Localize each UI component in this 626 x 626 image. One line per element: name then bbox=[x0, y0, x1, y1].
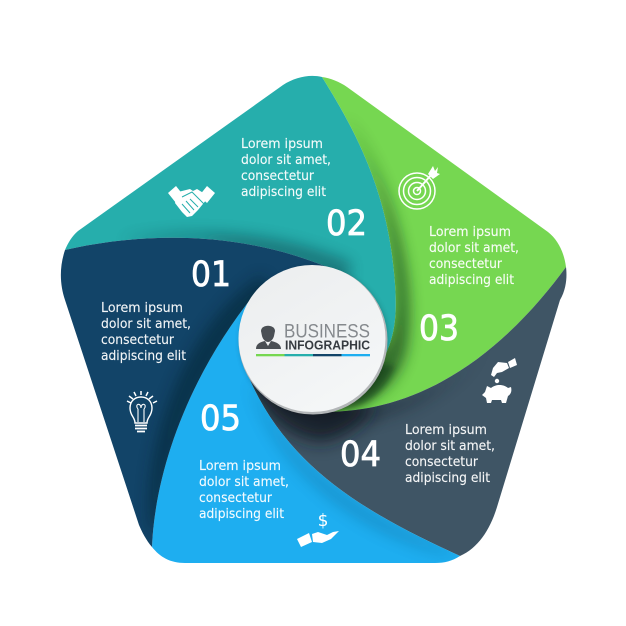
text: 02 description: dolor sit amet, bbox=[241, 153, 331, 168]
panel: 02 teal segment bbox=[65, 76, 396, 372]
text: 02 description: Lorem ipsum bbox=[241, 137, 323, 152]
text: 04 description: dolor sit amet, bbox=[405, 439, 495, 454]
infographic: pentagon with five spiral segments bbox=[60, 76, 566, 563]
number: 01: 01 bbox=[191, 255, 231, 295]
text: 01 description bbox=[101, 301, 191, 364]
number: 03: 03 bbox=[419, 309, 459, 349]
panel: 05 blue segment bbox=[152, 285, 460, 563]
number: 05: 05 bbox=[200, 399, 241, 439]
panel: 03 green segment bbox=[312, 77, 566, 412]
panel: 04 slate segment bbox=[245, 267, 566, 556]
heading: INFOGRAPHIC: INFOGRAPHIC bbox=[285, 338, 370, 352]
icon: businessman bbox=[256, 326, 281, 349]
text: 02 description bbox=[241, 137, 331, 200]
text: 04 description: adipiscing elit bbox=[405, 471, 490, 486]
center circle badge bbox=[238, 265, 388, 415]
text: 03 description: consectetur bbox=[429, 257, 503, 272]
text: 03 description: Lorem ipsum bbox=[429, 225, 511, 240]
text: 01 description: Lorem ipsum bbox=[101, 301, 183, 316]
colour bar bbox=[256, 354, 370, 356]
text: 04 description: Lorem ipsum bbox=[405, 423, 487, 438]
panel: 01 navy segment bbox=[61, 238, 345, 547]
number: 04: 04 bbox=[340, 435, 381, 475]
icon: light bulb bbox=[127, 391, 157, 432]
text: 05 description: adipiscing elit bbox=[199, 507, 284, 522]
icon: hand dropping coin into piggy bank bbox=[482, 358, 517, 403]
icon: target with arrow bbox=[399, 166, 440, 209]
text: 02 description: consectetur bbox=[241, 169, 315, 184]
text: 01 description: adipiscing elit bbox=[101, 349, 186, 364]
text: 05 description: Lorem ipsum bbox=[199, 459, 281, 474]
text: 04 description bbox=[405, 423, 495, 486]
text: 05 description: dolor sit amet, bbox=[199, 475, 289, 490]
text: 01 description: dolor sit amet, bbox=[101, 317, 191, 332]
text: 03 description bbox=[429, 225, 519, 288]
text: 02 description: adipiscing elit bbox=[241, 185, 326, 200]
text: 04 description: consectetur bbox=[405, 455, 479, 470]
text: 01 description: consectetur bbox=[101, 333, 175, 348]
number: 02: 02 bbox=[326, 204, 367, 244]
text: 05 description: consectetur bbox=[199, 491, 273, 506]
text: 03 description: dolor sit amet, bbox=[429, 241, 519, 256]
text: 05 description bbox=[199, 459, 289, 522]
heading: BUSINESS: BUSINESS bbox=[284, 320, 370, 342]
icon: hand holding dollar bbox=[297, 511, 339, 547]
icon: handshake bbox=[168, 186, 215, 217]
icon: hand holding dollar: $ bbox=[318, 511, 328, 531]
text: 03 description: adipiscing elit bbox=[429, 273, 514, 288]
